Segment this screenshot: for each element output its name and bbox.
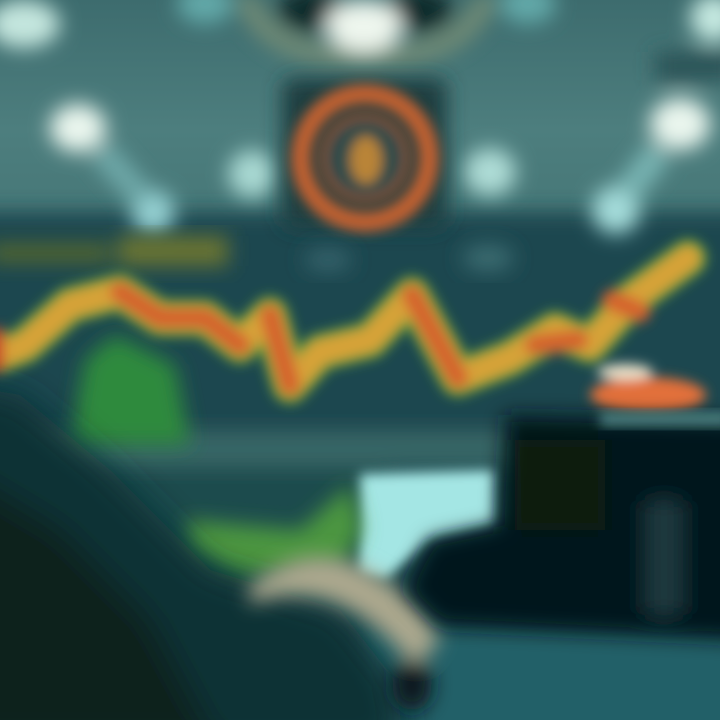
- background: dark chart board: [0, 212, 720, 720]
- ceiling lights: [0, 0, 720, 234]
- beige arm: [250, 557, 440, 711]
- orange target emblem: [282, 78, 447, 228]
- line chart zigzag: [0, 258, 688, 385]
- monitor top highlight: [600, 412, 720, 426]
- green area lower: [185, 485, 362, 578]
- green bar: [70, 335, 190, 445]
- ceiling ring: [177, 0, 556, 58]
- bright cyan screen: [358, 470, 495, 580]
- dark monitor block right: [405, 415, 720, 640]
- small labels on board: [0, 236, 514, 272]
- orange dish on desk: [590, 364, 706, 413]
- background: upper wall: [0, 0, 720, 235]
- dark figure silhouette left: [0, 385, 405, 720]
